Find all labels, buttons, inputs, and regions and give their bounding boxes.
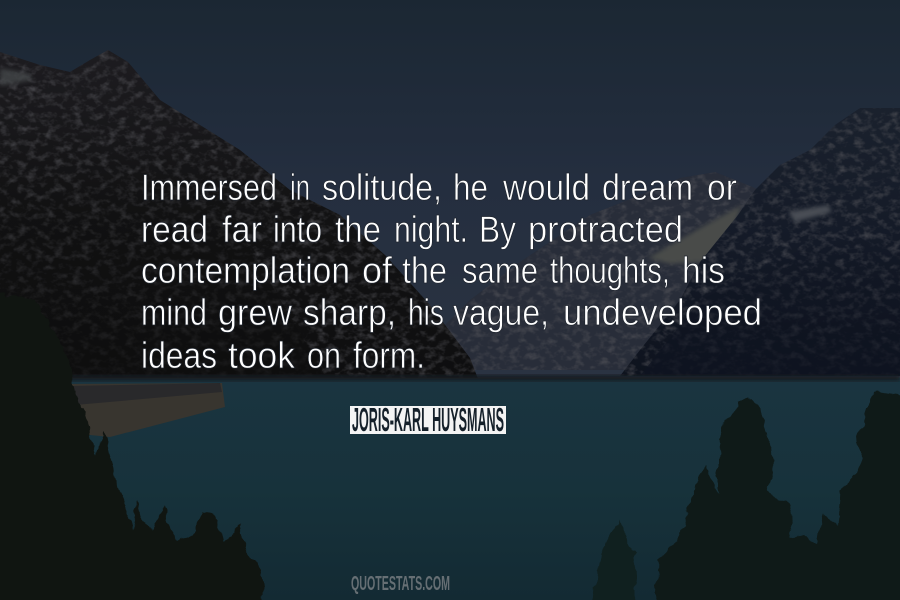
- quote line 1: he: [453, 167, 488, 208]
- background: sky: [0, 0, 900, 400]
- background: pine trees left: [0, 290, 263, 600]
- quote line 1: or: [707, 167, 737, 208]
- quote line 2: [141, 209, 683, 250]
- background: snow patch: [648, 205, 742, 264]
- quote line 4: grew: [218, 292, 292, 333]
- background: distant valley mountains: [400, 172, 830, 370]
- background: pine trees right: [590, 393, 900, 600]
- background: left summit snow: [0, 68, 32, 86]
- quote line 1: Immersed: [141, 167, 277, 208]
- background: right snow streak: [788, 205, 832, 222]
- background: right mountain: [620, 108, 900, 376]
- quote line 5: [141, 335, 425, 376]
- quote line 4: vague,: [453, 292, 549, 333]
- background: small pine: [590, 519, 636, 600]
- quote line 4: his: [408, 292, 444, 333]
- quote line 4: mind: [141, 292, 207, 333]
- quote line 3: thoughts,: [550, 250, 670, 291]
- quote line 2: into: [273, 209, 322, 250]
- quote line 2: night.: [394, 209, 468, 250]
- quote line 3: of: [362, 250, 393, 291]
- quote line 3: the: [402, 250, 447, 291]
- background: lake: [0, 378, 900, 600]
- quote line 1: in: [290, 167, 310, 208]
- quote line 4: [141, 292, 762, 333]
- quote line 5: form.: [353, 335, 425, 376]
- author label: [350, 401, 506, 438]
- background: shoreline shadow: [0, 375, 900, 381]
- quote line 4: undeveloped: [563, 292, 762, 333]
- quote line 3: contemplation: [141, 250, 350, 291]
- quote line 2: protracted: [528, 209, 683, 250]
- quote line 5: ideas: [141, 335, 217, 376]
- quote line 1: dream: [602, 167, 693, 208]
- quote line 2: far: [222, 209, 262, 250]
- background: left mountain: [0, 50, 480, 384]
- quote line 1: solitude,: [322, 167, 442, 208]
- quote line 4: sharp,: [303, 292, 396, 333]
- quote line 5: took: [228, 335, 295, 376]
- quote line 1: [141, 167, 737, 208]
- quote line 5: on: [307, 335, 341, 376]
- quote line 2: the: [335, 209, 381, 250]
- quote line 2: read: [141, 209, 208, 250]
- source watermark: QUOTESTATS.COM: [351, 573, 450, 595]
- infographic canvas: JORIS-KARL HUYSMANS: [352, 401, 504, 438]
- quote line 3: same: [462, 250, 538, 291]
- quote line 3: his: [682, 250, 725, 291]
- quote line 3: [141, 250, 725, 291]
- quote text: [141, 167, 762, 376]
- quote line 1: would: [502, 167, 590, 208]
- background: dam wall: [60, 383, 225, 437]
- quote line 2: By: [479, 209, 516, 250]
